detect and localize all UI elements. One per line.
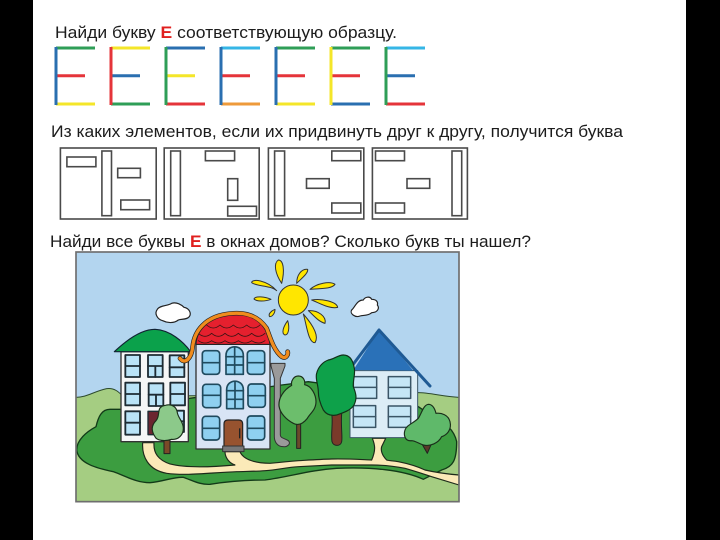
letter E 4: [221, 47, 260, 105]
letter E 2: [111, 47, 150, 105]
letter E 6: [331, 47, 370, 105]
roof scallops: [198, 325, 265, 343]
right black side bar: [686, 0, 720, 540]
house 3 windows: [353, 377, 411, 427]
blue roof house: [350, 330, 430, 438]
left black side bar: [0, 0, 33, 540]
puzzle boxes with letter pieces: [60, 148, 467, 219]
cream footpaths: [143, 438, 459, 485]
sun with rays: [252, 260, 338, 343]
round tree beside house 2: [279, 376, 316, 448]
house 1 door: [148, 411, 163, 435]
door step: [223, 446, 244, 452]
house 2 wall: [196, 344, 270, 449]
tall tree: [316, 355, 356, 445]
small tree in front of house 1: [152, 405, 183, 454]
house 2 door: [224, 420, 243, 447]
orange roof trim: [180, 313, 288, 361]
cloud right: [351, 297, 378, 316]
house 1 windows: [125, 355, 185, 435]
puzzle box 3: [268, 148, 364, 219]
house 2 windows: [202, 347, 265, 440]
red roof house: [180, 313, 288, 452]
green roof house: [114, 329, 191, 442]
letter E 1: [56, 47, 95, 105]
puzzle box 2: [164, 148, 259, 219]
drainpipe: [271, 363, 289, 447]
house 2 red roof: [196, 313, 270, 344]
row of coloured stick letters: [56, 47, 425, 105]
letter E 7: [386, 47, 425, 105]
heading: find the matching letter: Найди букву Е соответствующую образцу.: [55, 23, 397, 42]
question: which elements form the letter: Из каких элементов, если их придвинуть друг к другу, получится буква: [51, 122, 624, 141]
house 3 wall: [350, 371, 418, 438]
letter E 5: [276, 47, 315, 105]
puzzle box 4: [372, 148, 467, 219]
house 3 roof edges: [353, 330, 430, 386]
letter E 3: [166, 47, 205, 105]
house 1 wall: [121, 352, 188, 442]
bush tree at right: [404, 404, 450, 453]
illustration: houses scene: [76, 252, 459, 502]
light green hills: [76, 388, 459, 502]
house 1 roof: [114, 329, 191, 352]
cloud left: [156, 303, 190, 323]
picture frame: [76, 252, 459, 502]
sky: [76, 252, 459, 502]
question: find all letters in the windows: Найди все буквы Е в окнах домов? Сколько букв ты нашел?: [50, 232, 531, 251]
door handle: [239, 428, 240, 438]
house 3 roof: [353, 330, 413, 371]
dark green lawn: [77, 382, 457, 484]
orange roof trim outline: [180, 313, 288, 361]
puzzle box 1: [60, 148, 156, 219]
